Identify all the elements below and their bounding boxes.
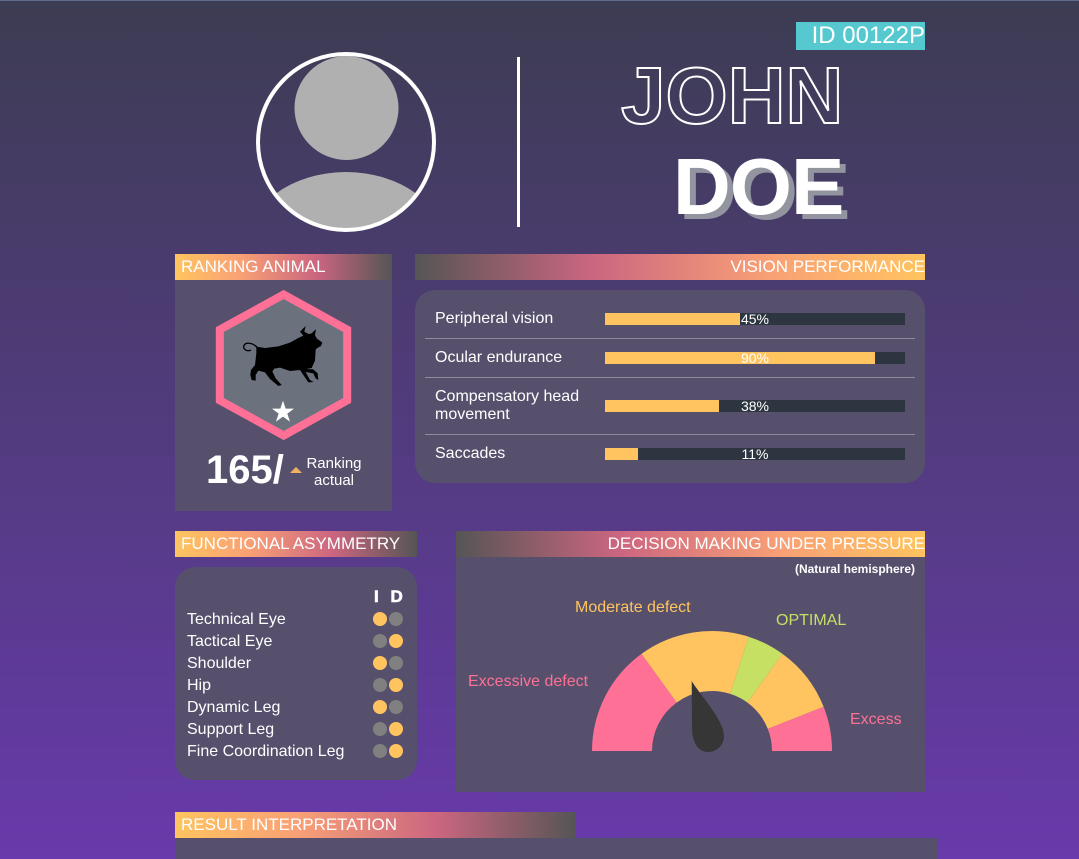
panel: functional asymmetry <box>175 567 417 780</box>
icon: up triangle <box>290 467 302 473</box>
bar: peripheral vision <box>605 313 905 325</box>
row: ocular endurance: Ocular endurance <box>435 349 562 366</box>
heading: result interpretation: RESULT INTERPRETATION <box>181 815 397 834</box>
heading: decision making under pressure <box>456 531 925 557</box>
bar: peripheral vision: 45% <box>741 311 769 327</box>
heading: result interpretation <box>175 812 576 838</box>
panel: decision making <box>456 557 925 792</box>
bar: saccades: 11% <box>742 446 768 462</box>
bar: ocular endurance: 90% <box>741 350 769 366</box>
bar: compensatory head movement: 38% <box>741 398 769 414</box>
row: dynamic leg: Dynamic Leg <box>187 699 280 716</box>
gauge chart <box>592 631 832 752</box>
heading: decision making under pressure: DECISION MAKING UNDER PRESSURE <box>608 534 925 553</box>
heading: ranking animal <box>175 254 392 280</box>
row: peripheral vision: Peripheral vision <box>435 310 553 327</box>
label: excessive defect: Excessive defect <box>468 673 588 690</box>
row: technical eye: Technical Eye <box>187 611 286 628</box>
bar: saccades <box>605 448 905 460</box>
ID badge: ID 00122P <box>812 22 925 49</box>
heading: vision performance <box>415 254 925 280</box>
heading: functional asymmetry <box>175 531 417 557</box>
row: shoulder: Shoulder <box>187 655 251 672</box>
column labels: I D <box>374 587 403 606</box>
panel: vision performance <box>415 290 925 483</box>
label: excess: Excess <box>850 711 902 728</box>
divider <box>517 57 520 227</box>
bar: compensatory head movement <box>605 400 905 412</box>
rank number: 165/ <box>206 448 284 492</box>
bar: ocular endurance <box>605 352 905 364</box>
icon: profile avatar <box>256 52 436 232</box>
row: compensatory head movement <box>435 388 579 423</box>
heading: functional asymmetry: FUNCTIONAL ASYMMETRY <box>181 534 400 553</box>
row: saccades: Saccades <box>435 445 505 462</box>
rank caption: actual <box>314 472 354 489</box>
row: support leg: Support Leg <box>187 721 274 738</box>
rank caption <box>306 455 362 489</box>
panel: result interpretation <box>175 838 938 859</box>
icon: hexagon badge with bull <box>216 290 352 440</box>
row: hip: Hip <box>187 677 211 694</box>
row: fine coordination leg: Fine Coordination Leg <box>187 743 344 760</box>
last name: DOE <box>673 142 843 231</box>
label: moderate defect: Moderate defect <box>575 599 691 616</box>
row: compensatory head movement: Compensatory head <box>435 388 579 405</box>
top edge line <box>0 0 1079 1</box>
panel: ranking animal <box>175 280 392 511</box>
rank caption: Ranking <box>306 455 362 472</box>
heading: vision performance: VISION PERFORMANCE <box>730 257 925 276</box>
needle <box>692 681 724 752</box>
label: optimal: OPTIMAL <box>776 612 846 629</box>
row: tactical eye: Tactical Eye <box>187 633 272 650</box>
row: compensatory head movement: movement <box>435 406 510 423</box>
heading: ranking animal: RANKING ANIMAL <box>181 257 326 276</box>
note: (Natural hemisphere) <box>795 562 915 576</box>
